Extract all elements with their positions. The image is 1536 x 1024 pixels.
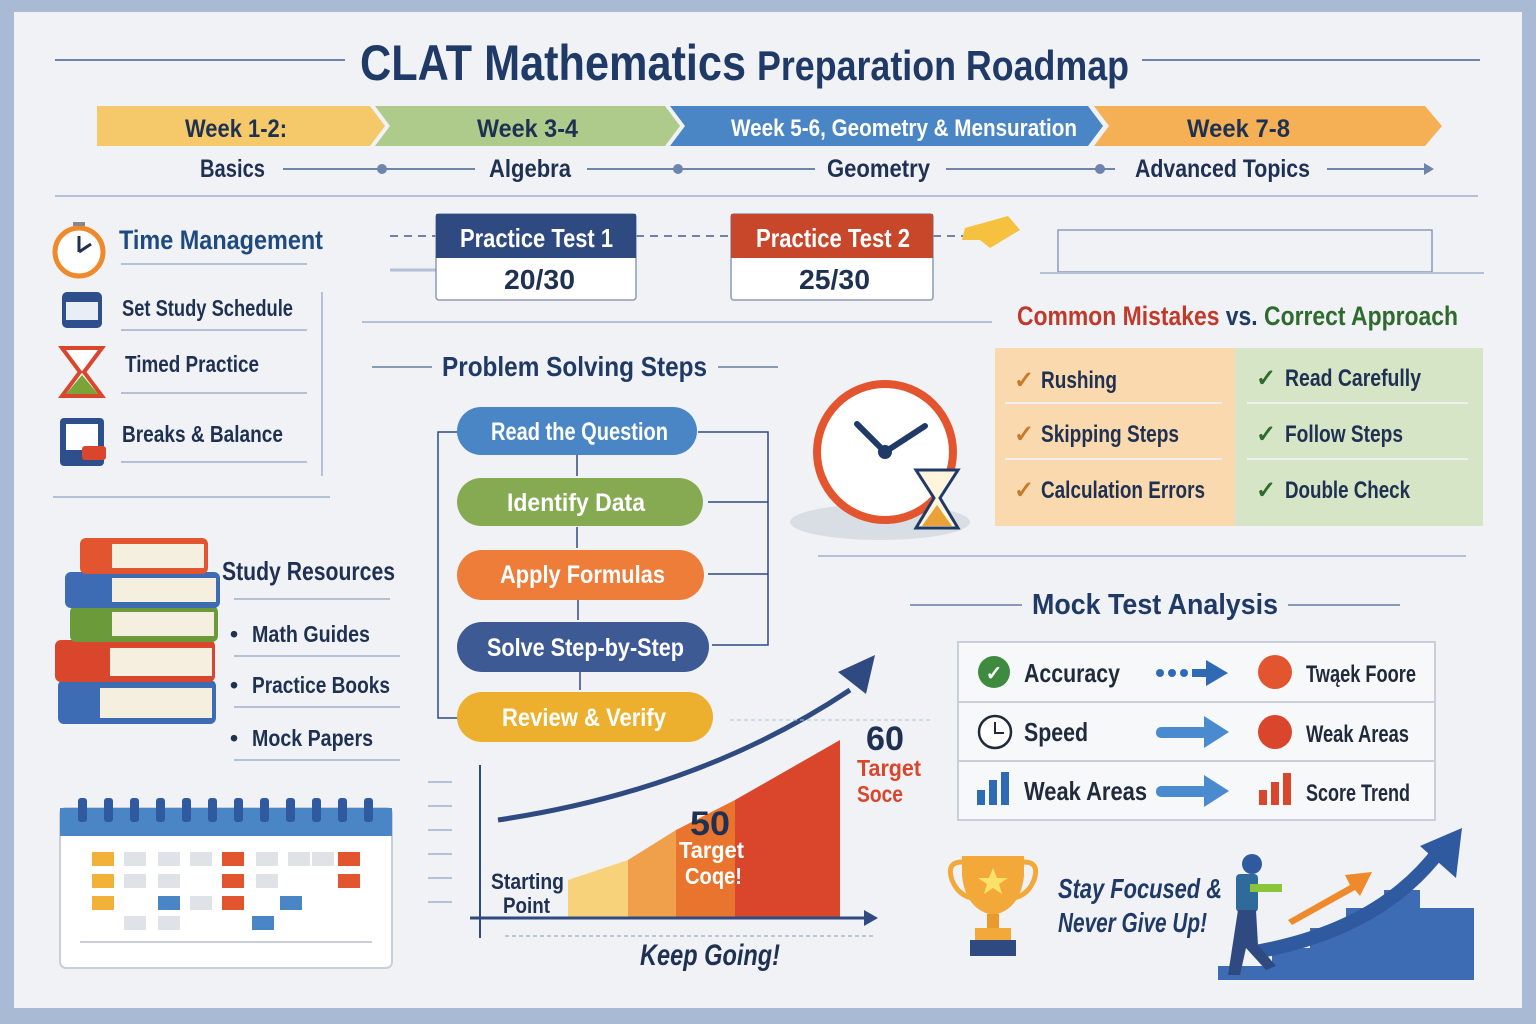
- panel: time management: Timed Practice: [125, 351, 259, 377]
- chart: score growth: 50: [690, 805, 730, 843]
- chart: score growth: Keep Going!: [640, 939, 780, 972]
- chart: score growth: 60: [866, 720, 904, 758]
- icon: breaks: [60, 418, 106, 466]
- practice tests: [390, 214, 1484, 300]
- card: practice test 1: [436, 214, 636, 300]
- week banner: Basics: [200, 155, 265, 183]
- week banner: Geometry: [827, 155, 930, 183]
- table: mistakes vs correct: Read Carefully: [1285, 365, 1422, 392]
- icon: arrow flag: [962, 216, 1020, 248]
- chart: score growth: Soce: [857, 781, 903, 807]
- table: mistakes vs correct: ✓: [1014, 477, 1034, 504]
- panel: study resources: Math Guides: [252, 621, 370, 647]
- text: motivation: Stay Focused &: [1058, 873, 1222, 904]
- icon: clock with hourglass: [790, 384, 970, 540]
- chart: score growth: Target: [679, 837, 744, 863]
- panel: study resources: Mock Papers: [252, 725, 373, 751]
- table: mistakes vs correct: Follow Steps: [1285, 421, 1403, 448]
- week banner: Algebra: [489, 155, 572, 183]
- chart: score growth: [428, 655, 930, 972]
- table: mistakes vs correct: ✓: [1014, 421, 1034, 448]
- table: mistakes vs correct: Skipping Steps: [1041, 421, 1179, 448]
- chart: score growth: Point: [503, 893, 551, 918]
- panel: time management: Breaks & Balance: [122, 421, 283, 447]
- text: motivation: [1058, 873, 1222, 938]
- panel: study resources: Study Resources: [222, 556, 395, 586]
- panel: time management: Set Study Schedule: [122, 295, 293, 321]
- chart: score growth: Coqe!: [685, 863, 742, 889]
- table: mock test analysis: Speed: [1024, 717, 1088, 747]
- table: mistakes vs correct: ✓: [1256, 421, 1276, 448]
- table: mock test analysis: [958, 642, 1435, 820]
- flowchart: steps: Apply Formulas: [500, 561, 665, 589]
- icon: calendar: [60, 798, 392, 968]
- flowchart: steps: Read the Question: [491, 418, 668, 446]
- icon: trophy: [950, 856, 1036, 956]
- panel: study resources: •: [230, 725, 238, 751]
- illustration: stairs with arrow: [1218, 828, 1474, 980]
- table: mistakes vs correct: Rushing: [1041, 367, 1117, 394]
- panel: time management: Time Management: [119, 225, 323, 255]
- title: Preparation Roadmap: [757, 42, 1129, 89]
- week banner: Week 3-4: [477, 115, 578, 143]
- heading: mock test analysis: Mock Test Analysis: [1032, 589, 1278, 621]
- table: mistakes vs correct: ✓: [1014, 367, 1034, 394]
- flowchart: steps: Identify Data: [507, 489, 646, 517]
- icon: books: [55, 538, 220, 724]
- text: motivation: Never Give Up!: [1058, 907, 1207, 938]
- table: mistakes vs correct: Double Check: [1285, 477, 1411, 504]
- panel: study resources: •: [230, 621, 238, 647]
- icon: stopwatch: [55, 222, 103, 276]
- table: mistakes vs correct: ✓: [1256, 477, 1276, 504]
- title: CLAT Mathematics: [360, 35, 746, 91]
- table: mock test analysis: ✓: [986, 663, 1002, 685]
- week banner: [97, 106, 1442, 183]
- week banner: Advanced Topics: [1135, 155, 1310, 183]
- table: mock test analysis: Twąek Foore: [1306, 661, 1416, 688]
- card: practice test 1: Practice Test 1: [460, 223, 613, 253]
- table: mock test analysis: Weak Areas: [1024, 776, 1147, 806]
- chart: score growth: Starting: [491, 869, 564, 894]
- heading: problem solving steps: Problem Solving Steps: [442, 351, 707, 382]
- card: practice test 2: Practice Test 2: [756, 223, 910, 253]
- table: mistakes vs correct: Calculation Errors: [1041, 477, 1205, 504]
- week banner: Week 1-2:: [185, 115, 287, 143]
- flowchart: steps: Review & Verify: [502, 704, 666, 732]
- week banner: Week 5-6, Geometry & Mensuration: [731, 115, 1077, 142]
- table: mock test analysis: Score Trend: [1306, 780, 1410, 807]
- table: mock test analysis: Weak Areas: [1306, 721, 1409, 748]
- panel: study resources: •: [230, 672, 238, 698]
- panel: study resources: [55, 538, 400, 760]
- panel: time management: [55, 222, 323, 476]
- card: practice test 1: 20/30: [504, 264, 575, 295]
- heading: common mistakes: Common Mistakes vs. Correct Approach: [1017, 301, 1458, 331]
- table: mistakes vs correct: [995, 348, 1483, 526]
- card: practice test 2: 25/30: [799, 264, 870, 295]
- flowchart: steps: [438, 407, 768, 742]
- table: mistakes vs correct: ✓: [1256, 365, 1276, 392]
- card: practice test 2: [731, 214, 933, 300]
- week banner: Week 7-8: [1187, 115, 1290, 143]
- title: [55, 35, 1480, 91]
- panel: study resources: Practice Books: [252, 672, 390, 698]
- icon: schedule: [62, 292, 102, 328]
- flowchart: steps: Solve Step-by-Step: [487, 634, 684, 662]
- table: mock test analysis: Accuracy: [1024, 658, 1120, 688]
- icon: hourglass: [62, 348, 102, 396]
- chart: score growth: Target: [857, 755, 921, 781]
